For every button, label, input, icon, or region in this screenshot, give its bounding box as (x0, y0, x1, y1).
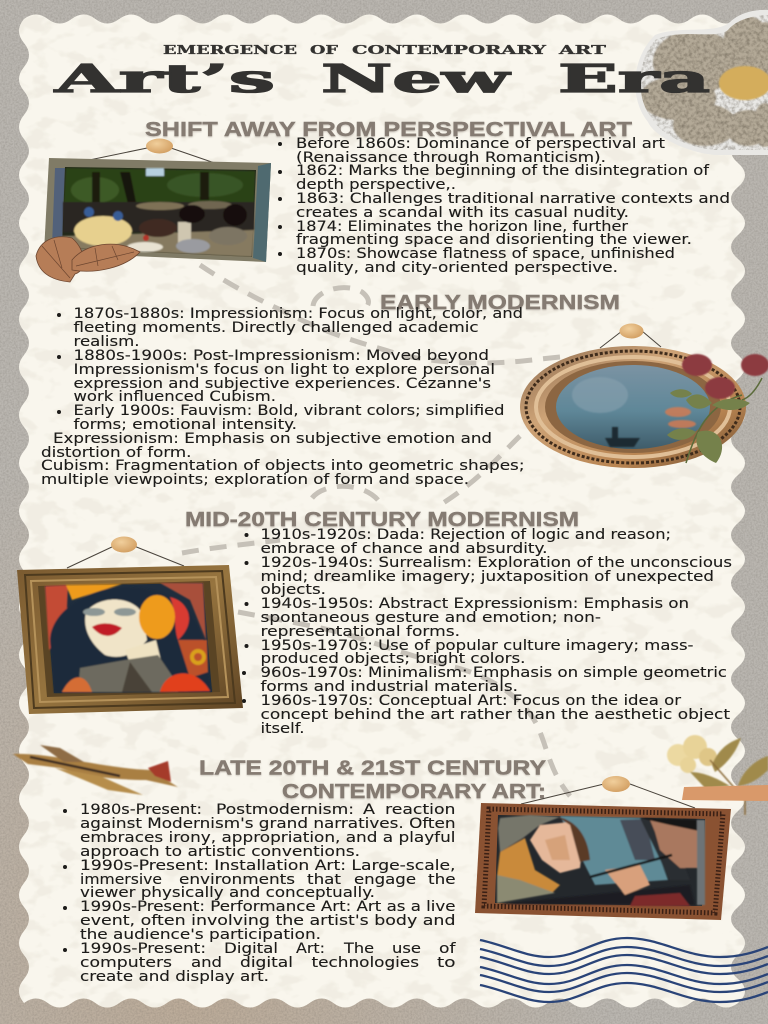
painting scene (60, 168, 255, 257)
text block: contemporary art timeline: technologies (312, 955, 419, 971)
text block: contemporary art timeline: digital (240, 955, 293, 971)
wooden frame (17, 565, 243, 714)
text block: contemporary art timeline: Postmodernism: (216, 802, 354, 818)
title: Art's New Era: Era (558, 56, 710, 101)
text block: early modernism timeline (41, 306, 524, 488)
text block: contemporary art timeline: 1980s-Present: (80, 802, 202, 818)
text block: contemporary art timeline: against Modernism's grand narratives. Often (80, 816, 456, 832)
text block: perspectival art timeline: 1870s: Showcase flatness of space, unfinished (296, 246, 675, 262)
text block: contemporary art timeline: and (191, 955, 222, 971)
text block: contemporary art timeline: use (392, 941, 421, 957)
heading: Late 20th and 21st Century Contemporary Art: CONTEMPORARY ART: (282, 780, 546, 803)
hanging pin two (620, 324, 644, 338)
text block: early modernism timeline: forms; emotional intensity. (74, 417, 297, 433)
text block: mid-century timeline (242, 527, 732, 737)
text block: contemporary art timeline: embraces irony, appropriation, and a playful (80, 830, 456, 846)
text block: contemporary art timeline: the audience's participation. (80, 927, 321, 943)
text block: mid-century timeline: itself. (260, 721, 304, 737)
tape strip (682, 785, 768, 801)
text block: early modernism timeline: work influenced Cubism. (74, 389, 276, 405)
heading: Late 20th and 21st Century Contemporary Art (199, 756, 546, 803)
text block: contemporary art timeline: engage (354, 872, 416, 888)
text block: perspectival art timeline: creates a scandal with its casual nudity. (296, 205, 629, 221)
icon: dried flower and tape (667, 735, 768, 815)
text block: mid-century timeline: objects. (260, 582, 326, 598)
painting: digital artist in carved frame (475, 776, 731, 920)
heading: Early Modernism: EARLY MODERNISM (380, 291, 620, 314)
hanging pin one (146, 138, 173, 154)
text block: mid-century timeline: 1920s-1940s: Surrealism: Exploration of the unconscious (260, 555, 732, 571)
kicker: Emergence of Contemporary Art: ART (557, 42, 607, 57)
text block: perspectival art timeline: fragmenting space and disorienting the viewer. (296, 232, 692, 248)
text block: early modernism timeline: Early 1900s: Fauvism: Bold, vibrant colors; simplified (74, 403, 505, 419)
frame one (44, 158, 271, 262)
text block: contemporary art timeline: of (439, 941, 457, 957)
text block: contemporary art timeline: immersive (80, 872, 162, 888)
text block: contemporary art timeline: computers (80, 955, 172, 971)
text block: contemporary art timeline: 1990s-Present: Performance Art: Art as a live (80, 899, 456, 915)
boat and sun reflection (572, 377, 696, 447)
kicker: Emergence of Contemporary Art: CONTEMPORARY (352, 42, 548, 57)
text block: perspectival art timeline: 1862: Marks the beginning of the disintegration of (296, 163, 710, 179)
icon: red flowers and leaves (667, 354, 768, 463)
text block: mid-century timeline: 1910s-1920s: Dada: Rejection of logic and reason; (260, 527, 671, 543)
title: Art's New Era (53, 56, 710, 101)
text block: early modernism timeline: Impressionism's focus on light to explore personal (74, 362, 495, 378)
text block: early modernism timeline: realism. (74, 334, 140, 350)
icon: dried paper flower (630, 10, 768, 155)
text block: contemporary art timeline: 1990s-Present: (80, 941, 206, 957)
text block: contemporary art timeline: approach to artistic conventions. (80, 844, 360, 860)
text block: mid-century timeline: representational forms. (260, 624, 460, 640)
text block: contemporary art timeline: viewer physically and conceptually. (80, 885, 375, 901)
icon: brown leaves (36, 237, 140, 282)
heading: Late 20th and 21st Century Contemporary Art: LATE 20TH & 21ST CENTURY (199, 756, 546, 780)
painting: Impression Sunrise in oval frame (520, 324, 768, 468)
icon: vintage airplane (13, 745, 178, 795)
hanging pin three (111, 536, 137, 552)
kicker: Emergence of Contemporary Art: OF (310, 42, 338, 57)
text block: contemporary art timeline: The (343, 941, 374, 957)
heading: Mid-20th Century Modernism: MID-20TH CENTURY MODERNISM (185, 508, 579, 531)
text block: contemporary art timeline (63, 802, 457, 985)
text block: perspectival art timeline: quality, and city-oriented perspective. (296, 260, 618, 276)
text block: perspectival art timeline: depth perspective,. (296, 177, 456, 193)
oval frame (520, 346, 746, 468)
text block: perspectival art timeline: Before 1860s: Dominance of perspectival art (296, 136, 665, 152)
header: title block (53, 42, 710, 101)
text block: contemporary art timeline: environments (179, 872, 295, 888)
text block: contemporary art timeline: the (428, 872, 456, 888)
title: Art's New Era: New (321, 56, 512, 101)
text block: early modernism timeline: Expressionism: Emphasis on subjective emotion and (53, 431, 492, 447)
kicker: Emergence of Contemporary Art: EMERGENCE (163, 42, 297, 57)
text block: early modernism timeline: multiple viewpoints; exploration of form and space. (41, 472, 469, 488)
text block: early modernism timeline: 1880s-1900s: Post-Impressionism: Moved beyond (74, 348, 489, 364)
text block: mid-century timeline: 960s-1970s: Minimalism: Emphasis on simple geometric (260, 665, 727, 681)
text block: mid-century timeline: spontaneous gesture and emotion; non- (260, 610, 601, 626)
artist scene (497, 815, 705, 906)
text block: mid-century timeline: concept behind the art rather than the aesthetic object (260, 707, 730, 723)
text block: perspectival art timeline (278, 136, 730, 276)
kicker: Emergence of Contemporary Art (163, 42, 607, 57)
text block: mid-century timeline: produced objects; bright colors. (260, 651, 526, 667)
text block: early modernism timeline: fleeting moments. Directly challenged academic (74, 320, 479, 336)
painting: Music in the Tuileries with leaf (36, 138, 271, 282)
text block: contemporary art timeline: Digital (224, 941, 278, 957)
title: Art's New Era: Art’s (53, 56, 275, 101)
text block: contemporary art timeline: create and display art. (80, 969, 269, 985)
carved frame (475, 803, 731, 920)
text block: mid-century timeline: embrace of chance and absurdity. (260, 541, 548, 557)
painting: portrait of a woman in wooden frame (17, 536, 243, 714)
text block: mid-century timeline: 1960s-1970s: Conceptual Art: Focus on the idea or (260, 693, 681, 709)
text block: perspectival art timeline: 1874: Eliminates the horizon line, further (296, 219, 628, 235)
text block: early modernism timeline: 1870s-1880s: Impressionism: Focus on light, color, and (74, 306, 523, 322)
text block: contemporary art timeline: event, often involving the artist's body and (80, 913, 455, 929)
text block: mid-century timeline: forms and industrial materials. (260, 679, 518, 695)
dashed route line (182, 265, 570, 796)
text block: contemporary art timeline: 1990s-Present: Installation Art: Large-scale, (80, 858, 456, 874)
hanging pin four (602, 776, 630, 792)
text block: mid-century timeline: 1950s-1970s: Use of popular culture imagery; mass- (260, 638, 694, 654)
text block: mid-century timeline: mind; dreamlike imagery; juxtaposition of unexpected (260, 569, 714, 585)
text block: contemporary art timeline: to (437, 955, 456, 971)
text block: contemporary art timeline: A (363, 802, 375, 818)
text block: perspectival art timeline: (Renaissance through Romanticism). (296, 150, 606, 166)
text block: perspectival art timeline: 1863: Challenges traditional narrative contexts and (296, 191, 730, 207)
text block: early modernism timeline: Cubism: Fragmentation of objects into geometric shapes; (41, 458, 524, 474)
text block: early modernism timeline: distortion of form. (41, 445, 192, 461)
text block: early modernism timeline: expression and subjective experiences. Cézanne's (74, 376, 491, 392)
text block: contemporary art timeline: that (307, 872, 341, 888)
icon: blue postmark waves (480, 938, 768, 1002)
text block: mid-century timeline: 1940s-1950s: Abstract Expressionism: Emphasis on (260, 596, 689, 612)
heading: Shift Away: SHIFT AWAY FROM PERSPECTIVAL ART (145, 118, 633, 141)
text block: contemporary art timeline: Art: (296, 941, 325, 957)
text block: contemporary art timeline: reaction (385, 802, 456, 818)
portrait scene (45, 583, 212, 693)
